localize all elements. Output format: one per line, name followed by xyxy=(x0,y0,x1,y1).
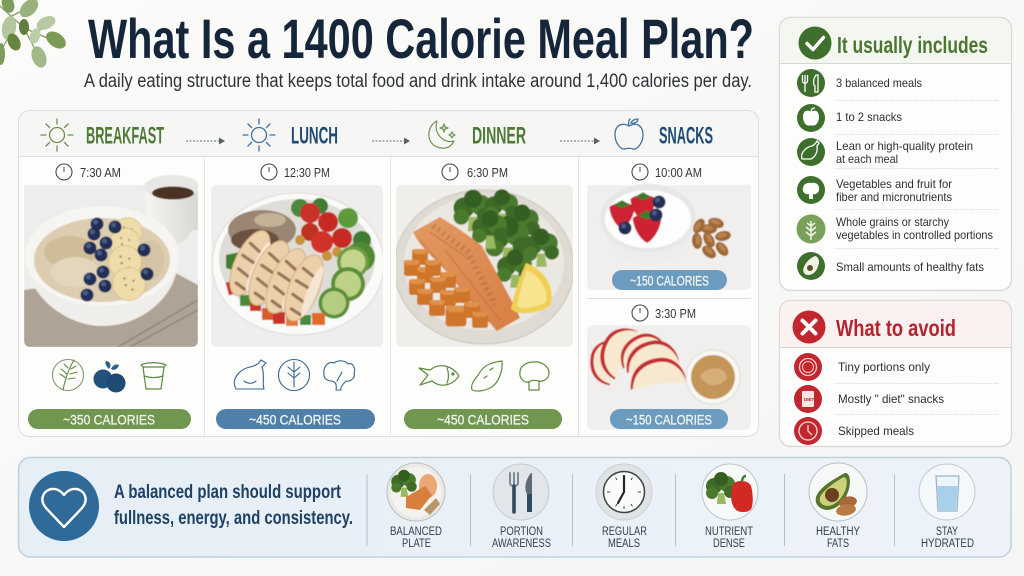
column: breakfast xyxy=(24,164,200,429)
benefit: portion awareness xyxy=(492,464,551,550)
item: vegetables: fiber and micronutrients xyxy=(836,190,952,204)
header: snacks: SNACKS xyxy=(659,122,713,150)
icon: chicken xyxy=(234,360,266,389)
item: whole grains xyxy=(796,214,993,244)
time: 7:30 AM xyxy=(56,164,121,180)
benefit: balanced plate xyxy=(387,463,445,550)
item: skipped meals: Skipped meals xyxy=(838,424,914,438)
icon: broccoli xyxy=(520,362,549,390)
time: 6:30 PM xyxy=(442,164,508,180)
benefit: healthy fats: FATS xyxy=(827,538,849,550)
header: lunch: LUNCH xyxy=(291,122,338,150)
calories pill: ~150 CALORIES xyxy=(630,272,709,288)
benefit: nutrient dense xyxy=(702,464,758,550)
icon: heart xyxy=(29,471,99,541)
benefit: balanced plate: BALANCED xyxy=(390,526,442,538)
header: dinner: DINNER xyxy=(472,122,526,150)
icon: apple xyxy=(615,119,643,149)
item: healthy fats xyxy=(797,252,984,280)
item: snacks: 1 to 2 snacks xyxy=(836,110,902,124)
column: snacks xyxy=(586,164,751,430)
calories pill xyxy=(610,409,728,429)
header: breakfast xyxy=(41,119,164,151)
benefit: healthy fats: HEALTHY xyxy=(816,526,860,538)
title: What Is a 1400 Calorie Meal Plan? xyxy=(88,7,754,70)
icon: sweet potato xyxy=(472,361,502,391)
statement: A balanced plan should support xyxy=(114,481,341,503)
benefit: regular meals xyxy=(596,464,652,550)
arrow xyxy=(372,138,410,144)
panel: balanced plan footer xyxy=(18,458,1011,557)
benefit: regular meals: MEALS xyxy=(608,538,640,550)
benefit: portion awareness: AWARENESS xyxy=(492,538,551,550)
header: breakfast: BREAKFAST xyxy=(86,122,164,150)
calories pill xyxy=(216,409,375,429)
benefit: balanced plate: PLATE xyxy=(402,538,431,550)
item: protein: at each meal xyxy=(836,152,898,166)
time: 10:00 AM xyxy=(632,164,702,180)
benefit: regular meals: REGULAR xyxy=(602,526,647,538)
icon: fish xyxy=(419,366,459,385)
benefit: nutrient dense: DENSE xyxy=(713,538,745,550)
benefit: nutrient dense: NUTRIENT xyxy=(705,526,753,538)
item: vegetables: Vegetables and fruit for xyxy=(836,177,952,191)
decoration: leafy branch xyxy=(0,0,69,70)
benefit: healthy fats xyxy=(809,463,867,550)
arrow xyxy=(186,138,225,144)
item: tiny portions: Tiny portions only xyxy=(838,360,930,374)
benefit: stay hydrated: HYDRATED xyxy=(921,538,974,550)
subtitle: A daily eating structure that keeps total food and drink intake around 1,400 calories per day. xyxy=(84,71,752,92)
statement: fullness, energy, and consistency. xyxy=(114,507,353,529)
item: whole grains: vegetables in controlled portions xyxy=(836,228,993,242)
icon: sun xyxy=(41,119,73,151)
icon: grain xyxy=(278,360,310,390)
calories pill xyxy=(612,270,727,290)
item: healthy fats: Small amounts of healthy fats xyxy=(836,260,984,274)
column: lunch xyxy=(211,164,384,429)
heading: What to avoid xyxy=(836,315,956,341)
icon: blueberries xyxy=(94,361,126,392)
time: 7:30 AM: 7:30 AM xyxy=(80,166,121,180)
column: dinner xyxy=(394,164,574,429)
calories pill: ~450 CALORIES xyxy=(437,412,529,428)
calories pill xyxy=(404,409,562,429)
item: protein xyxy=(797,138,973,166)
photo: oatmeal bowl xyxy=(24,175,200,347)
icon: check xyxy=(798,26,832,60)
calories pill: ~350 CALORIES xyxy=(63,412,155,428)
icon: sun xyxy=(243,119,275,151)
panel: it usually includes xyxy=(780,18,1012,290)
time: 6:30 PM: 6:30 PM xyxy=(467,166,508,180)
photo: salmon plate xyxy=(394,185,574,347)
time: 12:30 PM xyxy=(261,164,330,180)
item: diet snacks: Mostly " diet" snacks xyxy=(838,392,944,406)
benefit: stay hydrated xyxy=(919,464,975,550)
time: 3:30 PM: 3:30 PM xyxy=(655,307,696,321)
item: 3 balanced meals xyxy=(797,69,922,97)
item: tiny portions xyxy=(794,353,930,381)
benefit: stay hydrated: STAY xyxy=(936,526,958,538)
header: lunch xyxy=(243,119,338,151)
item: diet snacks xyxy=(794,385,944,413)
item: vegetables xyxy=(797,176,952,204)
benefit: portion awareness: PORTION xyxy=(500,526,543,538)
calories pill: ~150 CALORIES xyxy=(626,412,712,428)
icon: moon xyxy=(429,121,455,148)
item: whole grains: Whole grains or starchy xyxy=(836,215,949,229)
time: 12:30 PM: 12:30 PM xyxy=(284,166,330,180)
arrow xyxy=(560,138,600,144)
panel: what to avoid xyxy=(780,300,1012,446)
time: 3:30 PM xyxy=(632,305,696,321)
item: skipped meals xyxy=(794,417,914,445)
header: snacks xyxy=(615,119,713,150)
item: protein: Lean or high-quality protein xyxy=(836,139,973,153)
icon: cross xyxy=(792,310,826,344)
time: 10:00 AM: 10:00 AM xyxy=(655,166,702,180)
calories pill xyxy=(28,409,191,429)
icon: cup xyxy=(141,363,166,389)
panel: daily meal schedule xyxy=(18,110,758,436)
photo: chicken salad bowl xyxy=(211,185,384,347)
calories pill: ~450 CALORIES xyxy=(249,412,341,428)
photo: apple slices and peanut butter xyxy=(586,319,751,430)
item: snacks xyxy=(797,104,902,132)
photo: yogurt and almonds xyxy=(587,184,751,290)
icon: broccoli xyxy=(324,361,355,390)
icon: grain xyxy=(52,360,84,390)
item: 3 balanced meals: 3 balanced meals xyxy=(836,76,922,90)
header: dinner xyxy=(429,121,526,150)
item: diet snacks: DIET xyxy=(804,397,815,402)
statement xyxy=(114,481,353,529)
